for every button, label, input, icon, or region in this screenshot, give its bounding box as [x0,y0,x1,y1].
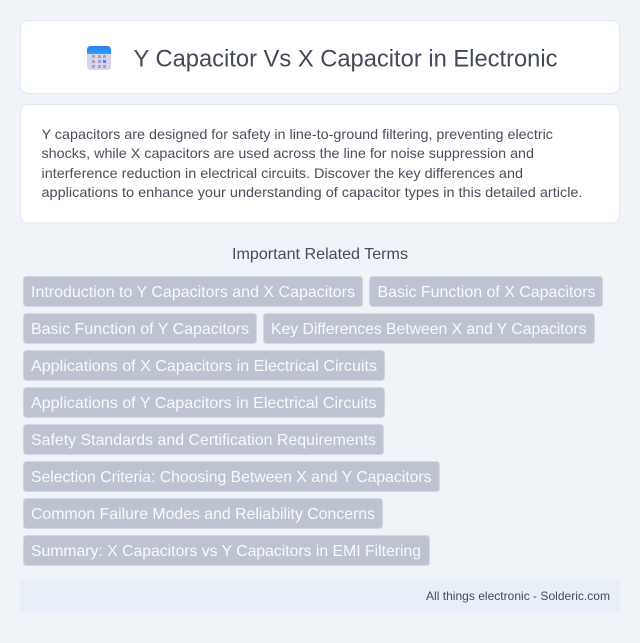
tag [24,314,256,344]
tag [24,462,440,492]
text block: description: applications to enhance your understanding of capacitor types in this detailed article. [42,184,582,200]
tag: Basic Function of Y Capacitors [31,321,249,338]
tag [24,276,362,306]
text block: description: interference reduction in electrical circuits. Discover the key differences and [42,165,523,181]
tag [24,498,382,528]
footer: All things electronic - Solderic.com [426,589,610,603]
title: Y Capacitor Vs X Capacitor in Electronic [134,46,558,72]
tag [24,388,384,418]
tag: Summary: X Capacitors vs Y Capacitors in EMI Filtering [31,543,421,560]
tag: Introduction to Y Capacitors and X Capacitors [31,284,355,301]
footer [20,579,620,613]
panel: header [20,20,620,94]
tag: Key Differences Between X and Y Capacitors [271,321,586,338]
heading: related terms: Important Related Terms [232,246,408,263]
tag: Applications of Y Capacitors in Electrical Circuits [31,395,376,412]
panel: related term tags [24,276,602,566]
tag: Common Failure Modes and Reliability Concerns [31,506,375,523]
tag [264,314,594,344]
tag: Selection Criteria: Choosing Between X and Y Capacitors [31,469,432,486]
tag: Safety Standards and Certification Requirements [31,432,376,449]
tag [24,424,384,454]
text block: description: shocks, while X capacitors are used across the line for noise suppression and [42,145,534,161]
icon: calendar [87,46,111,70]
tag: Basic Function of X Capacitors [378,284,596,301]
tag: Applications of X Capacitors in Electrical Circuits [31,358,377,375]
tag [24,350,384,380]
panel: description [20,104,620,223]
text block: description [42,126,582,200]
tag [24,536,430,566]
tag [370,276,602,306]
text block: description: Y capacitors are designed for safety in line-to-ground filtering, preventing electric [42,126,553,142]
